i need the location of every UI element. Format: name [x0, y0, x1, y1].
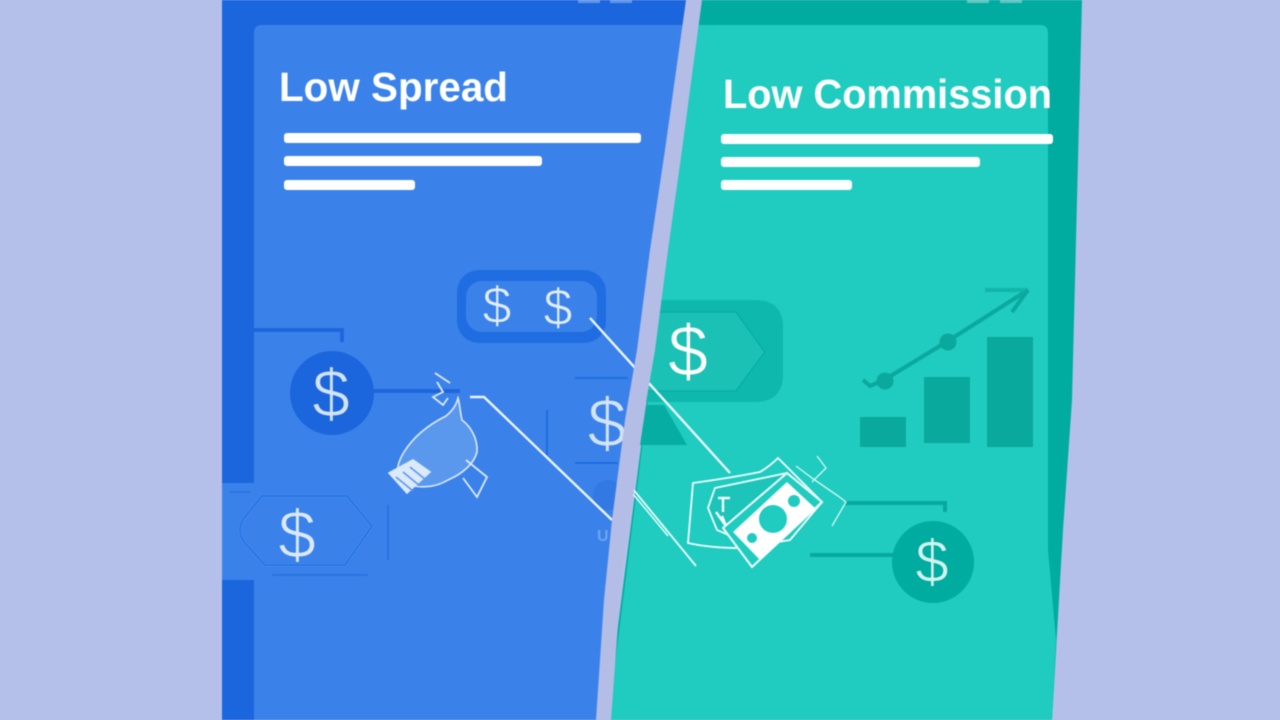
- icon: partial dollar tag: [547, 378, 628, 545]
- icon: hexagon dollar tag: [230, 492, 388, 575]
- bar chart with trend arrow: [860, 290, 1033, 447]
- heading: low spread: Low Spread: [279, 64, 508, 110]
- icon: dollar coin with connectors: $: [312, 356, 350, 432]
- icon: dollar coin with connectors: [254, 330, 460, 435]
- icon: dollar coin with connectors: $: [915, 528, 949, 595]
- icon: dollar coin with connectors: [810, 503, 974, 603]
- icon: dollar tag: $: [668, 312, 708, 392]
- icon: banknotes sketch: [688, 456, 846, 567]
- icon: partial dollar tag: $: [588, 384, 626, 462]
- icon: double dollar pill: $: [544, 279, 573, 337]
- icon: double dollar pill: $: [483, 277, 512, 335]
- icon: dollar tag: [640, 300, 783, 402]
- text placeholder lines: [721, 134, 1053, 190]
- text placeholder lines: [284, 133, 641, 190]
- divider: curved slash: [596, 0, 702, 720]
- panel: low spread: [222, 0, 690, 720]
- icon: partial dollar tag: U: [597, 528, 609, 545]
- leader line: [470, 397, 612, 520]
- icon: hexagon dollar tag: $: [278, 497, 316, 573]
- heading: low commission: Low Commission: [723, 71, 1052, 117]
- panel: low commission: [606, 0, 1082, 720]
- icon: trapezoid fragment: [640, 405, 687, 445]
- leader line: pill to banknotes: [590, 318, 730, 473]
- icon: double dollar pill: [457, 270, 606, 343]
- leader lines: [632, 488, 696, 566]
- icon: hand pointer sketch: [389, 373, 487, 497]
